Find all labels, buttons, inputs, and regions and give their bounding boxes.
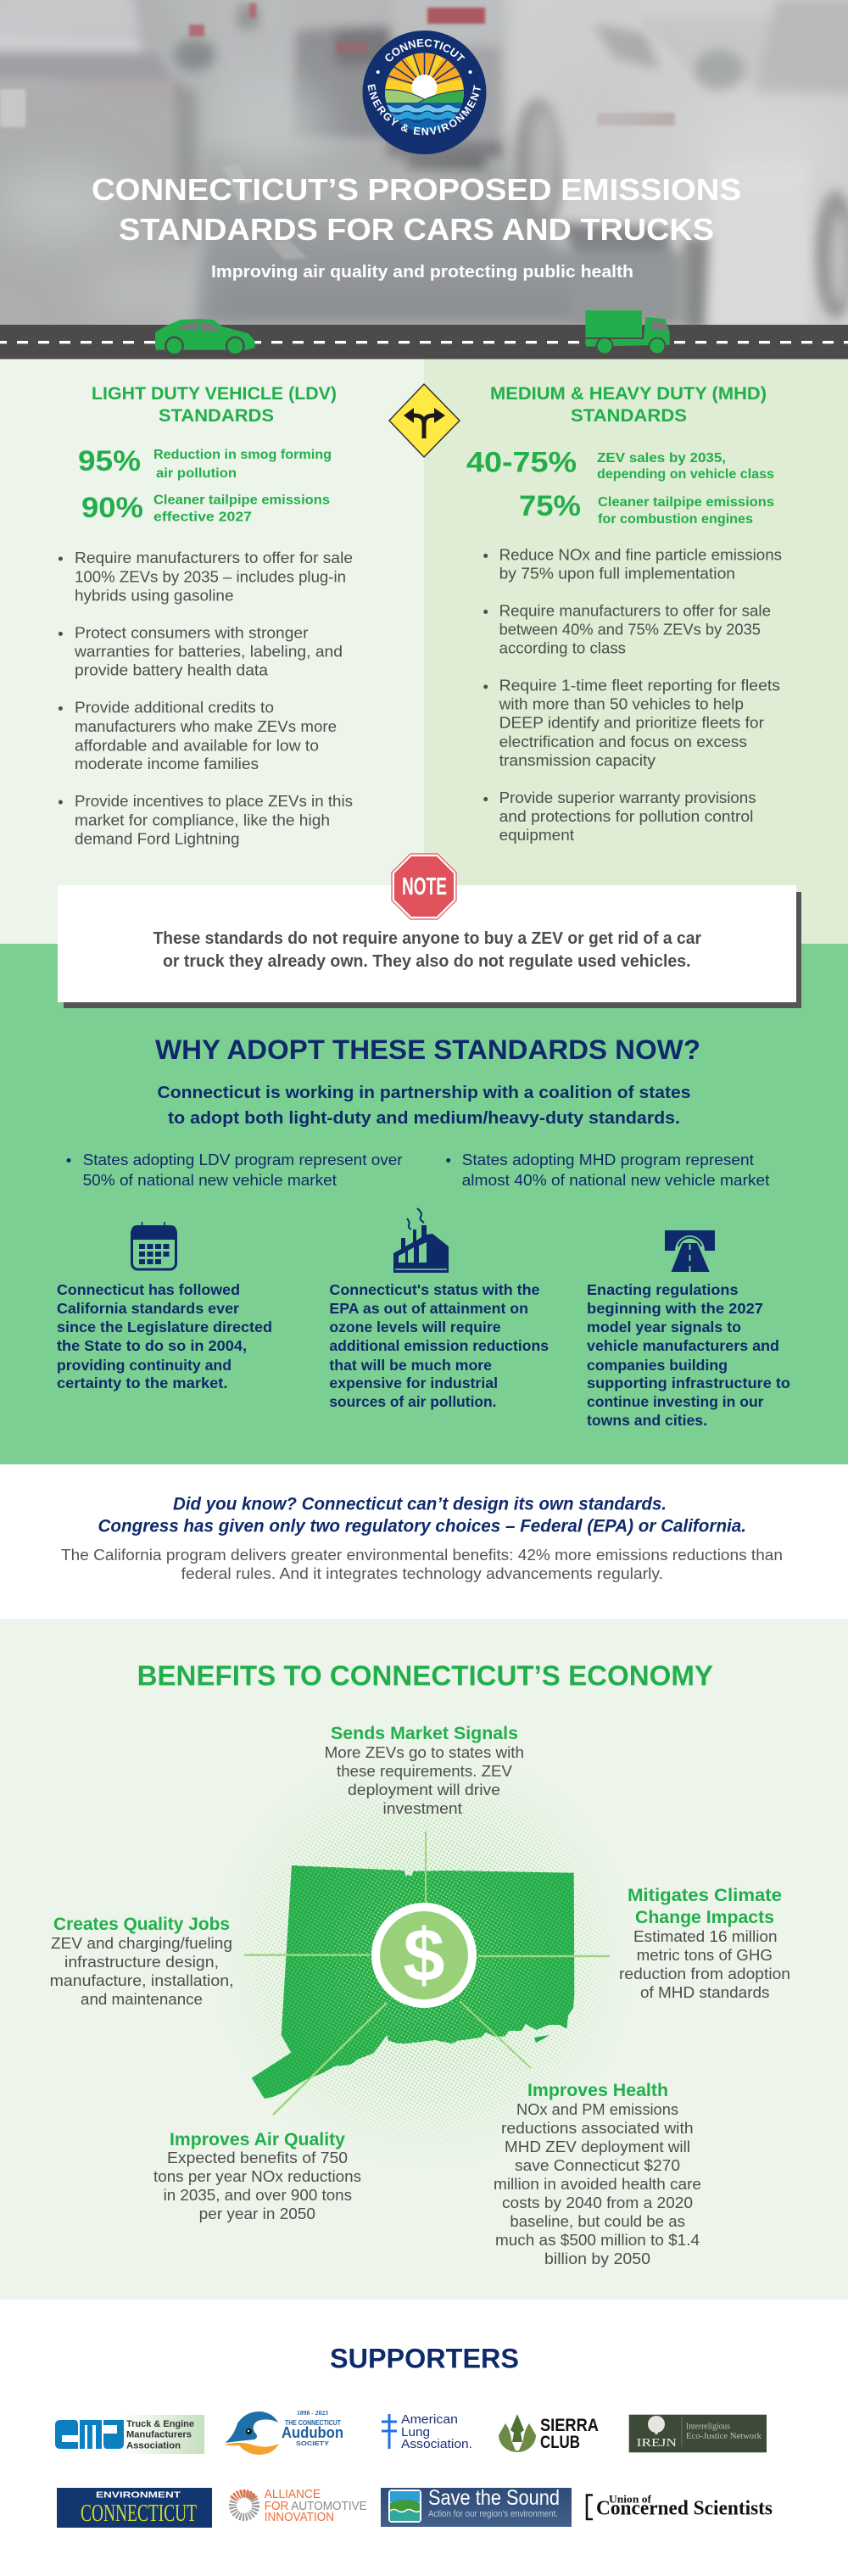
- callout: improves health: reductions associated with: [501, 2120, 694, 2137]
- text: California program benefits: federal rules. And it integrates technology advancements regularly.: [181, 1564, 663, 1582]
- bullet: reduce NOx: Reduce NOx and fine particle emissions: [499, 546, 782, 563]
- callout: improves health: MHD ZEV deployment will: [505, 2138, 690, 2155]
- logo: Sierra Club: [499, 2414, 599, 2452]
- callout: mitigates climate change impacts: reduction from adoption: [619, 1965, 790, 1982]
- callout: improves health: much as $500 million to $1.4: [495, 2232, 700, 2249]
- panel: why adopt background: [0, 944, 848, 1464]
- subtitle: Improving air quality and protecting public health: [211, 263, 633, 282]
- logo: American Lung Association: [382, 2412, 472, 2451]
- text: did you know: Did you know? Connecticut can’t design its own standards.: [173, 1495, 667, 1514]
- bullet: warranty: Provide superior warranty provisions: [499, 789, 756, 806]
- panel: light duty vehicle standards: [0, 360, 424, 945]
- text: column 1: certainty to the market.: [57, 1374, 227, 1391]
- heading: why adopt these standards now: WHY ADOPT THESE STANDARDS NOW?: [155, 1034, 700, 1065]
- bullet: ZEV sales requirement: Require manufacturers to offer for sale: [75, 549, 353, 566]
- callout: sends market signals: More ZEVs go to states with: [325, 1744, 524, 1761]
- heading: MHD standards: [490, 384, 767, 426]
- bullet: reduce NOx: [483, 546, 782, 583]
- callout: sends market signals: deployment will drive: [348, 1781, 500, 1798]
- logo: Connecticut Audubon Society: Audubon: [282, 2424, 343, 2441]
- bullet: offer for sale: according to class: [499, 640, 626, 657]
- bullet: LDV market share: States adopting LDV program represent over: [83, 1151, 403, 1168]
- text: column 1: the State to do so in 2004,: [57, 1337, 247, 1354]
- text: column 3: companies building: [587, 1357, 728, 1374]
- bullet: fleet reporting: electrification and focus on excess: [499, 733, 747, 750]
- callout: improves health: costs by 2040 from a 2020: [502, 2194, 693, 2211]
- stat: 95 percent: Reduction in smog forming: [153, 448, 332, 462]
- text: coalition statement: Connecticut is working in partnership with a coalition of states: [158, 1083, 690, 1102]
- logo: Union of Concerned Scientists: Concerned Scientists: [596, 2498, 773, 2520]
- text: column 1: providing continuity and: [57, 1357, 232, 1374]
- bullet: consumer protection: Protect consumers with stronger: [75, 625, 309, 642]
- text: column 3: towns and cities.: [587, 1412, 707, 1429]
- callout: improves health: billion by 2050: [544, 2250, 650, 2267]
- bullet: additional credits: Provide additional credits to: [75, 700, 274, 716]
- callout: creates quality jobs: Creates Quality Jobs: [53, 1915, 230, 1934]
- bullet: fleet reporting: transmission capacity: [499, 752, 656, 769]
- bullet: incentives: demand Ford Lightning: [75, 831, 239, 848]
- text: column 2: Connecticut's status with the: [329, 1281, 540, 1298]
- heading: MHD standards: MEDIUM & HEAVY DUTY (MHD): [490, 384, 767, 404]
- text: column 2: that will be much more: [329, 1357, 492, 1374]
- heading: LDV standards: [92, 384, 337, 426]
- callout: improves health: [494, 2081, 701, 2267]
- logo: Connecticut Audubon Society: 1898 - 2023: [297, 2410, 329, 2417]
- logo: EMA Truck and Engine Manufacturers Association: [55, 2415, 204, 2454]
- bullet: consumer protection: provide battery health data: [75, 662, 269, 679]
- callout: sends market signals: Sends Market Signals: [331, 1724, 518, 1743]
- bullet: warranty: and protections for pollution control: [499, 808, 753, 825]
- logo: Sierra Club: CLUB: [540, 2433, 580, 2452]
- panel: road strip: [0, 325, 848, 360]
- callout: creates quality jobs: [50, 1915, 234, 2008]
- bullet: fleet reporting: Require 1-time fleet reporting for fleets: [499, 677, 780, 694]
- stat: 40-75 percent: 40-75%: [466, 447, 577, 479]
- diagram: halftone Connecticut map with dollar sign: $: [404, 1913, 444, 1997]
- logo: EMA Truck and Engine Manufacturers Association: Association: [126, 2440, 181, 2451]
- callout: sends market signals: [325, 1724, 524, 1817]
- bullet: reduce NOx: by 75% upon full implementation: [499, 566, 735, 583]
- bullet: additional credits: moderate income families: [75, 756, 259, 772]
- text: note message: These standards do not require anyone to buy a ZEV or get rid of a car: [153, 929, 701, 948]
- stat: 90 percent: 90%: [81, 492, 143, 524]
- heading: LDV standards: STANDARDS: [159, 406, 274, 426]
- stat: 75 percent: [519, 490, 774, 527]
- callout: improves air quality: in 2035, and over 900 tons: [164, 2187, 352, 2204]
- callout: improves air quality: [153, 2130, 361, 2222]
- logo: Interreligious Eco-Justice Network: [629, 2415, 767, 2452]
- icon: factory: [393, 1208, 449, 1273]
- callout: improves health: Improves Health: [527, 2081, 668, 2100]
- bullet: incentives: Provide incentives to place ZEVs in this: [75, 793, 353, 810]
- logo: Save the Sound: Save the Sound: [428, 2486, 560, 2510]
- text: column 1: since the Legislature directed: [57, 1319, 272, 1335]
- callout: improves health: save Connecticut $270: [515, 2157, 680, 2174]
- bullet: consumer protection: [59, 625, 343, 679]
- bullet: ZEV sales requirement: [59, 549, 353, 605]
- callout: mitigates climate change impacts: metric tons of GHG: [637, 1947, 773, 1964]
- callout: creates quality jobs: manufacture, installation,: [50, 1972, 234, 1989]
- text: coalition statement: [158, 1083, 690, 1128]
- icon: stop sign note: [392, 854, 456, 919]
- panel: medium and heavy duty standards: [424, 360, 848, 945]
- stat: 95 percent: [78, 445, 332, 481]
- callout: creates quality jobs: ZEV and charging/fueling: [51, 1935, 232, 1952]
- logo: Environment Connecticut: CONNECTICUT: [81, 2500, 197, 2527]
- logo: Environment Connecticut: ENVIRONMENT: [96, 2490, 181, 2501]
- stat: 40-75 percent: [466, 447, 774, 482]
- callout: improves air quality: Expected benefits of 750: [167, 2149, 348, 2166]
- bullet: MHD market share: [446, 1151, 770, 1189]
- text: column 1: California standards ever: [57, 1300, 239, 1317]
- bullet: MHD market share: States adopting MHD program represent: [462, 1151, 754, 1168]
- panel: benefits section background: [0, 1619, 848, 2300]
- icon: calendar: [131, 1222, 176, 1269]
- text: coalition statement: to adopt both light-duty and medium/heavy-duty standards.: [168, 1108, 680, 1128]
- logo: Interreligious Eco-Justice Network: IREJN: [637, 2437, 677, 2450]
- callout: improves air quality: per year in 2050: [199, 2205, 315, 2222]
- logo: Save the Sound: [381, 2486, 572, 2527]
- logo: Connecticut Energy and Environment seal: CONNECTICUT: [385, 39, 465, 61]
- heading: benefits to Connecticut's economy: BENEFITS TO CONNECTICUT’S ECONOMY: [137, 1660, 713, 1692]
- icon: green car on road: [155, 319, 255, 356]
- logo: EMA Truck and Engine Manufacturers Association: Truck & Engine: [126, 2419, 194, 2429]
- text: column 3: continue investing in our: [587, 1393, 764, 1410]
- logo: American Lung Association: Lung: [401, 2425, 430, 2439]
- bullet: additional credits: affordable and available for low to: [75, 737, 319, 754]
- callout: improves air quality: Improves Air Quality: [170, 2130, 345, 2149]
- stat: 90 percent: Cleaner tailpipe emissions: [153, 493, 330, 507]
- icon: stop sign note: NOTE: [402, 873, 447, 900]
- text: column 3: Enacting regulations: [587, 1281, 739, 1298]
- logo: Interreligious Eco-Justice Network: Eco-Justice Network: [686, 2432, 762, 2441]
- logo: Union of Concerned Scientists: Union of: [609, 2493, 652, 2506]
- bullet: ZEV sales requirement: hybrids using gasoline: [75, 588, 234, 605]
- logo: Alliance for Automotive Innovation: ALLIANCE: [265, 2488, 321, 2501]
- heading: MHD standards: STANDARDS: [571, 406, 687, 426]
- stat: 40-75 percent: ZEV sales by 2035,: [597, 451, 726, 466]
- stat: 95 percent: 95%: [78, 445, 141, 477]
- title: [92, 172, 741, 247]
- callout: creates quality jobs: and maintenance: [81, 1991, 203, 2008]
- diagram: halftone Connecticut map with dollar sign: [212, 1743, 636, 2167]
- logo: Environment Connecticut: [57, 2488, 212, 2528]
- logo: Alliance for Automotive Innovation: FOR AUTOMOTIVE: [265, 2500, 367, 2513]
- title: CONNECTICUT’S PROPOSED EMISSIONS: [92, 172, 741, 207]
- logo: American Lung Association: American: [401, 2412, 458, 2427]
- callout: note box: [58, 854, 801, 1008]
- text: column 3: beginning with the 2027: [587, 1300, 763, 1317]
- logo: Alliance for Automotive Innovation: [232, 2488, 367, 2524]
- logo: EMA Truck and Engine Manufacturers Association: Manufacturers: [126, 2430, 192, 2440]
- bullet: incentives: [59, 793, 353, 848]
- text: note message: or truck they already own. They also do not regulate used vehicles.: [163, 952, 690, 971]
- panel: header photo of cars in smog: [0, 0, 848, 356]
- bullet: consumer protection: warranties for batteries, labeling, and: [74, 643, 343, 660]
- text: did you know: Congress has given only two regulatory choices – Federal (EPA) or California.: [98, 1517, 746, 1536]
- callout: improves health: million in avoided health care: [494, 2176, 701, 2193]
- text: California program benefits: [61, 1546, 783, 1582]
- bullet: MHD market share: almost 40% of national new vehicle market: [462, 1172, 770, 1189]
- heading: LDV standards: LIGHT DUTY VEHICLE (LDV): [92, 384, 337, 404]
- callout: improves health: NOx and PM emissions: [516, 2101, 678, 2118]
- bullet: LDV market share: [66, 1151, 403, 1189]
- bullet: offer for sale: Require manufacturers to offer for sale: [499, 603, 771, 620]
- text: column 2: additional emission reductions: [329, 1337, 549, 1354]
- text: column 2: ozone levels will require: [329, 1319, 501, 1335]
- logo: Connecticut Energy and Environment seal: [363, 31, 487, 154]
- logo: Connecticut Audubon Society: THE CONNECTICUT: [285, 2419, 341, 2427]
- logo: Interreligious Eco-Justice Network: Interreligious: [686, 2422, 730, 2431]
- callout: improves air quality: tons per year NOx reductions: [153, 2168, 361, 2185]
- title: STANDARDS FOR CARS AND TRUCKS: [119, 212, 714, 247]
- bullet: ZEV sales requirement: 100% ZEVs by 2035 – includes plug-in: [75, 568, 346, 585]
- text: did you know: [98, 1495, 746, 1536]
- bullet: warranty: equipment: [499, 827, 574, 844]
- text: column 3: model year signals to: [587, 1319, 741, 1335]
- text: column 2: EPA as out of attainment on: [329, 1300, 528, 1317]
- callout: mitigates climate change impacts: Mitigates Climate: [628, 1886, 782, 1905]
- bullet: LDV market share: 50% of national new vehicle market: [83, 1172, 337, 1189]
- callout: sends market signals: investment: [383, 1800, 462, 1817]
- callout: mitigates climate change impacts: [619, 1886, 790, 2001]
- logo: Connecticut Energy and Environment seal: ENERGY & ENVIRONMENT: [368, 84, 481, 136]
- stat: 90 percent: effective 2027: [153, 510, 252, 524]
- text: column 1: Connecticut has followed: [57, 1281, 240, 1298]
- bullet: incentives: market for compliance, like the high: [75, 811, 330, 828]
- bullet: offer for sale: [483, 603, 771, 657]
- bullet: fleet reporting: DEEP identify and prioritize fleets for: [499, 715, 764, 732]
- callout: mitigates climate change impacts: Change Impacts: [635, 1908, 774, 1927]
- logo: Connecticut Audubon Society: [225, 2410, 343, 2455]
- callout: mitigates climate change impacts: Estimated 16 million: [633, 1928, 777, 1945]
- bullet: offer for sale: between 40% and 75% ZEVs by 2035: [499, 621, 761, 638]
- bullet: additional credits: [59, 700, 337, 772]
- callout: creates quality jobs: infrastructure design,: [64, 1954, 219, 1971]
- logo: American Lung Association: Association.: [401, 2437, 472, 2451]
- bullet: fleet reporting: [483, 677, 780, 769]
- logo: Alliance for Automotive Innovation: INNOVATION: [265, 2511, 334, 2524]
- icon: green truck on road: [585, 310, 670, 354]
- callout: improves health: baseline, but could be as: [510, 2213, 685, 2230]
- logo: Sierra Club: SIERRA: [540, 2416, 599, 2435]
- text: column 3: [587, 1281, 790, 1429]
- stat: 90 percent: [81, 492, 330, 524]
- bullet: additional credits: manufacturers who make ZEVs more: [75, 718, 337, 735]
- text: column 2: sources of air pollution.: [329, 1393, 497, 1410]
- logo: Connecticut Audubon Society: SOCIETY: [296, 2441, 329, 2447]
- text: column 3: vehicle manufacturers and: [587, 1337, 779, 1354]
- icon: yellow split-road sign: [389, 384, 460, 457]
- stat: 95 percent: air pollution: [156, 466, 237, 481]
- stat: 40-75 percent: depending on vehicle class: [597, 467, 774, 482]
- text: column 2: [329, 1281, 549, 1410]
- bullet: warranty: [483, 789, 756, 844]
- callout: mitigates climate change impacts: of MHD standards: [640, 1984, 770, 2001]
- text: California program benefits: The California program delivers greater environmental benefits: 42% more emissions reductions than: [61, 1546, 783, 1564]
- stat: 75 percent: Cleaner tailpipe emissions: [598, 495, 774, 510]
- stat: 75 percent: for combustion engines: [598, 512, 753, 527]
- logo: Save the Sound: Action for our region’s environment.: [428, 2509, 558, 2519]
- text: note message: [153, 929, 701, 971]
- bullet: fleet reporting: with more than 50 vehicles to help: [499, 695, 744, 712]
- callout: sends market signals: these requirements. ZEV: [337, 1763, 512, 1780]
- text: column 1: [57, 1281, 272, 1391]
- heading: supporters: SUPPORTERS: [330, 2344, 519, 2374]
- stat: 75 percent: 75%: [519, 490, 581, 522]
- text: column 2: expensive for industrial: [329, 1374, 498, 1391]
- icon: road with overpass: [665, 1230, 715, 1272]
- text: column 3: supporting infrastructure to: [587, 1374, 790, 1391]
